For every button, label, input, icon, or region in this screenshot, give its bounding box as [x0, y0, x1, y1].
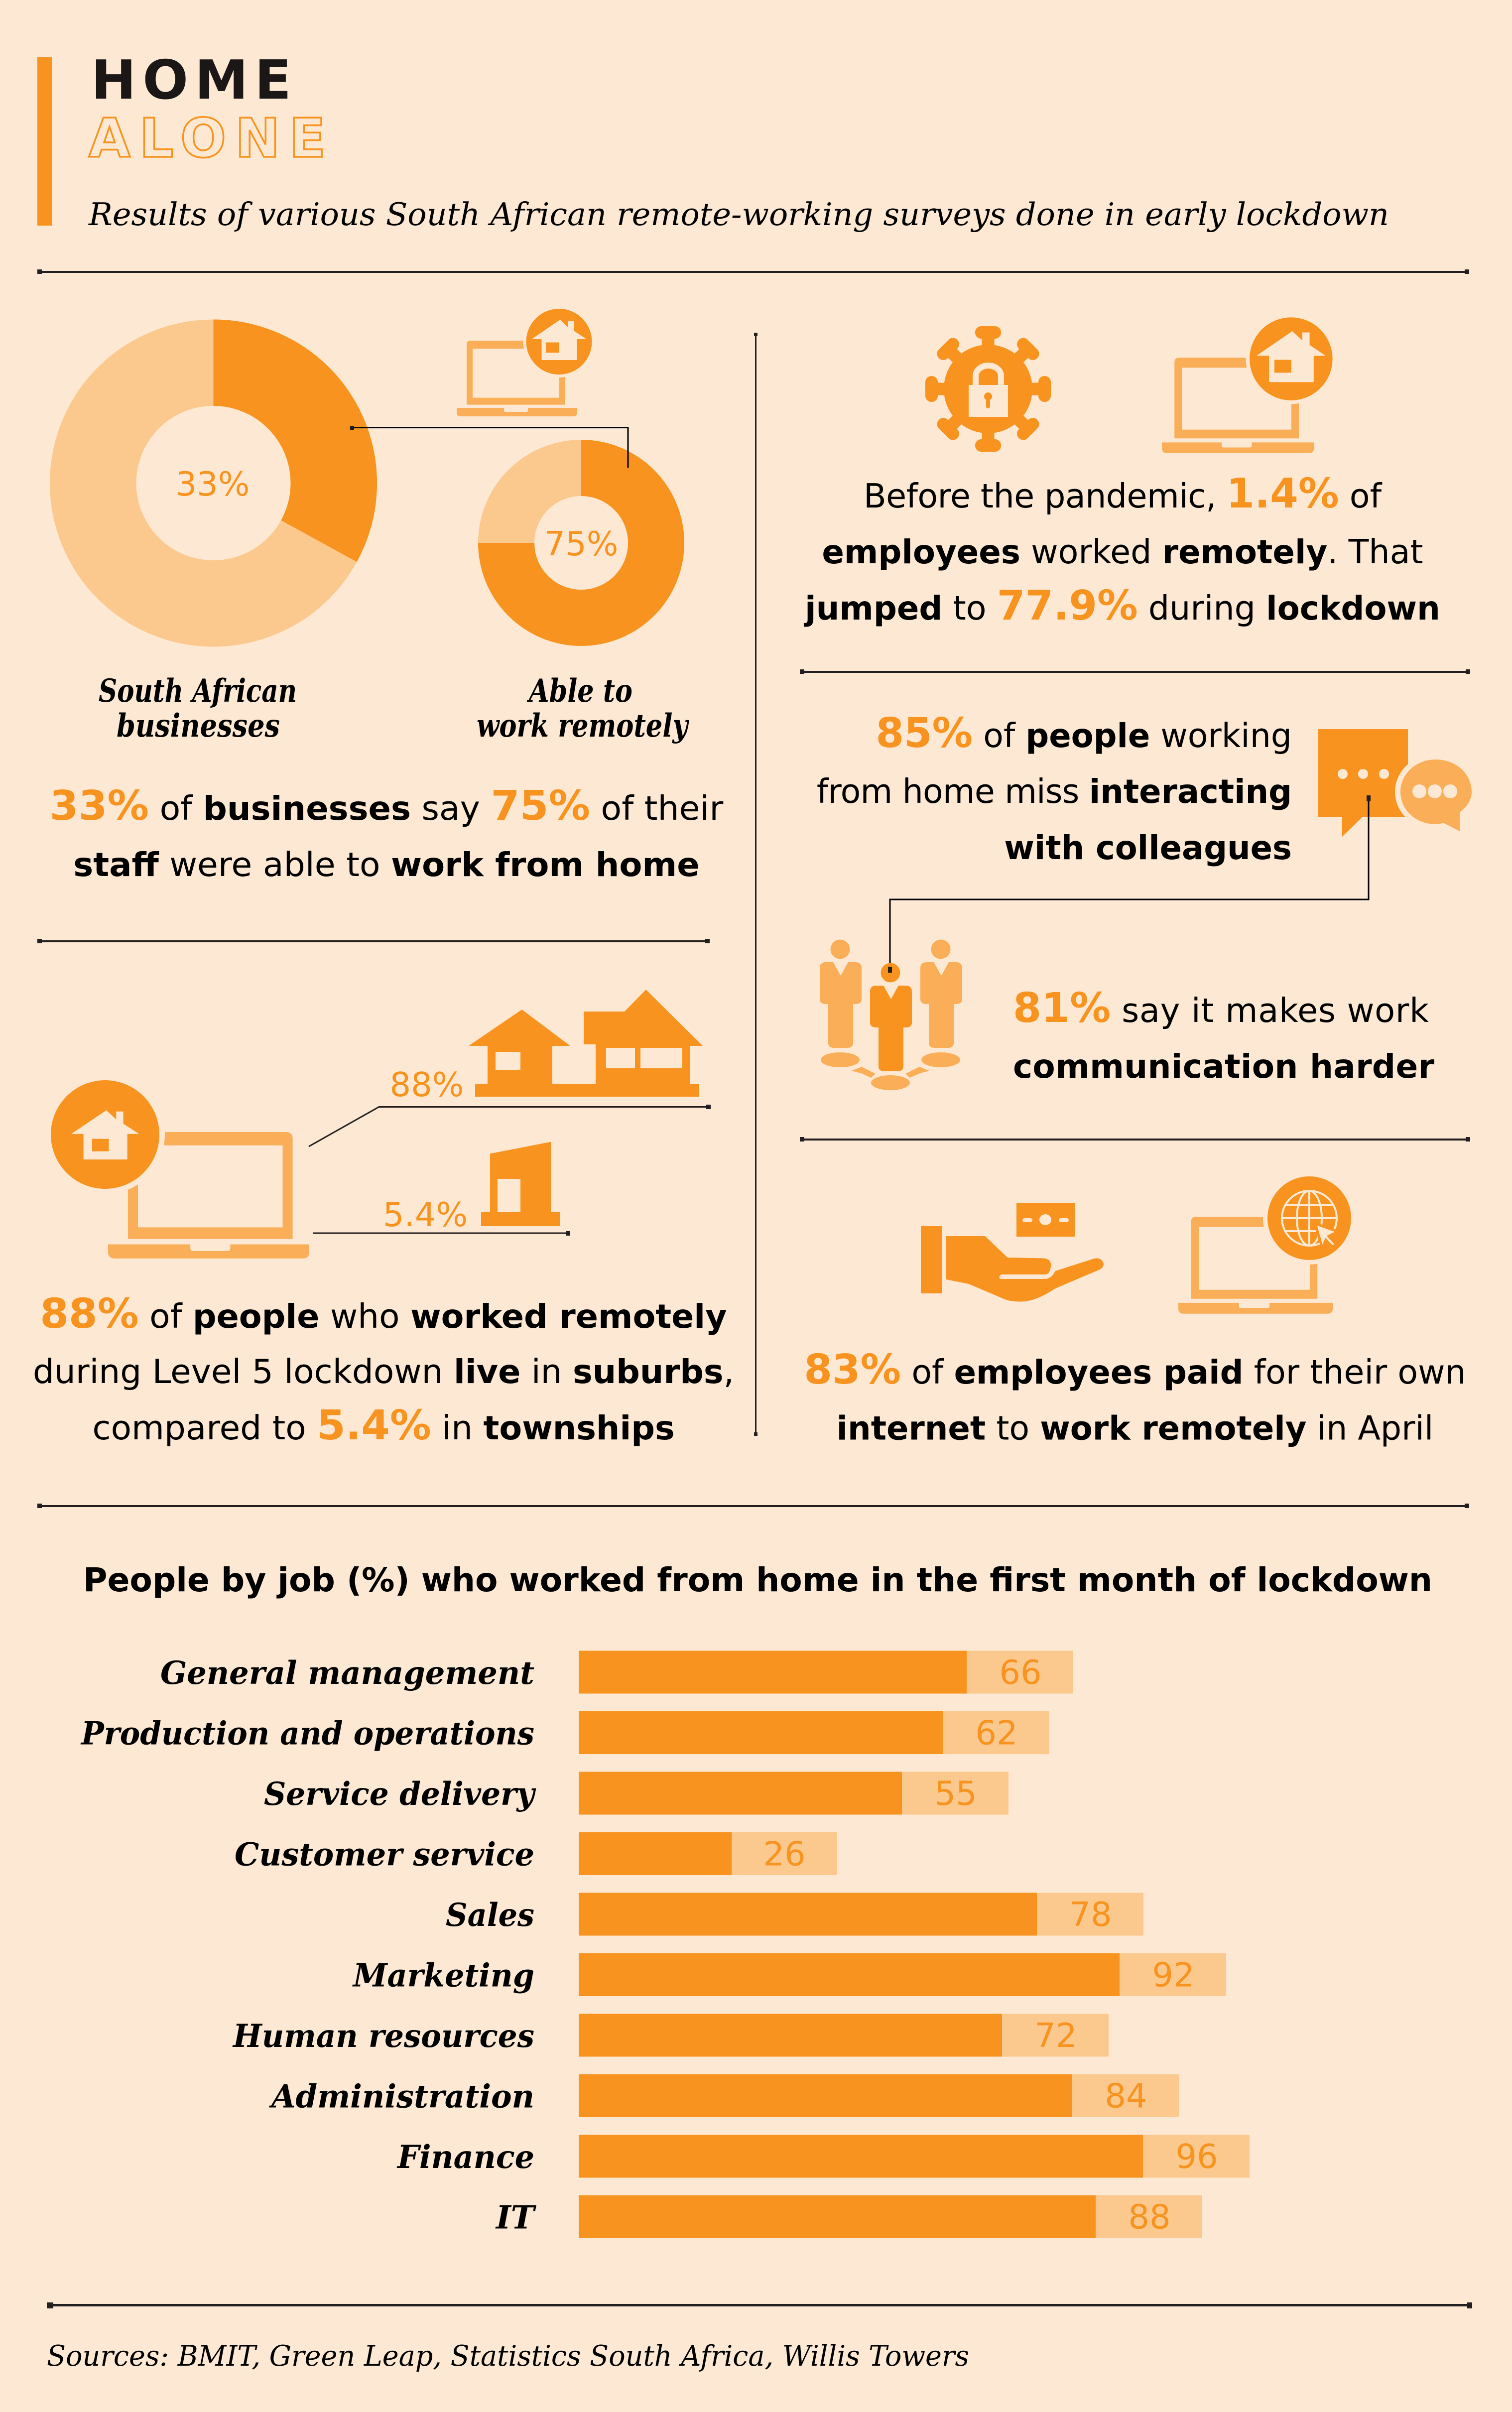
bar: service delivery: 55 [934, 1774, 977, 1813]
leader line: 5.4% [313, 1231, 570, 1236]
bar: administration [269, 2074, 1179, 2117]
text: 85% of people: 85% of people working [876, 710, 1292, 757]
text: 83% of employees paid: 83% of employees paid for their own [804, 1346, 1466, 1394]
text: 88% of people: compared to [92, 1408, 317, 1447]
bar: sales: 78 [1069, 1895, 1112, 1934]
bar: sales: Sales [446, 1897, 534, 1934]
panel: suburbs versus townships [33, 990, 734, 1449]
bar: finance: Finance [396, 2139, 534, 2176]
bar chart [80, 1650, 1250, 2238]
title accent bar [37, 57, 52, 226]
panel: before the pandemic [803, 314, 1440, 630]
value: 88%: 88% [390, 1065, 464, 1104]
text: 83% of employees paid: internet [837, 1409, 986, 1448]
bar: human resources [232, 2014, 1109, 2057]
icon: hand with banknote [921, 1203, 1104, 1302]
chart title: People by job (%) who worked from home in the first month of lockdown [83, 1561, 1432, 1599]
bar: general management [160, 1650, 1073, 1693]
text: 88% of people: live in suburbs, [454, 1352, 734, 1391]
icon: suburban houses [469, 990, 703, 1097]
bar: administration: Administration [269, 2078, 534, 2116]
leader line: 88% [309, 1105, 711, 1146]
text: 88% of people: during Level 5 lockdown [33, 1352, 454, 1391]
panel: businesses able to work remotely [50, 306, 724, 884]
subtitle: Results of various South African remote-working surveys done in early lockdown [88, 196, 1389, 233]
label: able to work remotely: Able to [527, 672, 632, 710]
bar: finance [396, 2135, 1250, 2177]
panel: paying for internet [804, 1172, 1466, 1448]
bar: general management: General management [160, 1654, 534, 1692]
bar: it [495, 2195, 1202, 2238]
text: 88% of people: 88% of people who worked remotely [40, 1290, 727, 1338]
text: 33% of businesses: 33% of businesses say 75% of their [50, 782, 723, 830]
text: 85% of people: interacting [1089, 772, 1292, 811]
bar: service delivery: Service delivery [264, 1776, 536, 1813]
bar: sales [446, 1893, 1143, 1935]
title: alone: ALONE [89, 108, 326, 170]
bar: it: IT [495, 2199, 536, 2236]
bar: marketing [352, 1953, 1226, 1996]
label: south african businesses [99, 672, 297, 745]
donut: 75% able to work remotely [478, 440, 684, 646]
label: south african businesses: businesses [117, 707, 280, 745]
sources: Sources: BMIT, Green Leap, Statistics South Africa, Willis Towers [47, 2340, 969, 2373]
bar: human resources: Human resources [232, 2018, 534, 2055]
text: before the pandemic: Before the pandemic, 1.4% of [864, 470, 1382, 517]
icon: virus with lock [925, 326, 1051, 452]
title: home: HOME [91, 49, 291, 112]
text: 88% of people: 5.4% in townships [317, 1402, 675, 1449]
donut: 33% of businesses: 33% [176, 465, 250, 504]
panel: missing colleagues [817, 710, 1477, 1090]
bar: finance: 96 [1175, 2137, 1218, 2176]
icon: laptop with home [457, 306, 595, 416]
bar: production and operations: Production and operations [80, 1715, 534, 1752]
text: before the pandemic: worked remotely. That [1031, 532, 1423, 571]
bar: it: 88 [1128, 2197, 1171, 2236]
text: 33% of businesses: were able to work from home [169, 845, 700, 884]
text: 33% of businesses: staff [73, 845, 159, 884]
bar: marketing: 92 [1152, 1955, 1195, 1994]
text: 85% of people: with colleagues [1004, 829, 1292, 867]
bar: marketing: Marketing [352, 1957, 534, 1994]
icon: laptop with globe [1178, 1172, 1356, 1314]
label: able to work remotely [477, 672, 689, 745]
icon: township shack [481, 1142, 560, 1226]
bar: customer service: Customer service [235, 1836, 534, 1874]
icon: three people [820, 939, 962, 1090]
value: 5.4%: 5.4% [383, 1195, 468, 1234]
bar: administration: 84 [1105, 2077, 1147, 2116]
bar: service delivery [264, 1772, 1008, 1815]
donut: 75% able to work remotely: 75% [544, 524, 618, 563]
bar: customer service [235, 1832, 837, 1875]
donut: 33% of businesses [93, 320, 377, 604]
connector [888, 795, 1371, 973]
connector [350, 426, 628, 468]
bar: general management: 66 [999, 1653, 1042, 1692]
text: before the pandemic: jumped [803, 589, 942, 628]
bar: customer service: 26 [763, 1835, 806, 1874]
icon: laptop with home [1162, 314, 1336, 453]
text: 81% communication harder: communication harder [1013, 1047, 1435, 1086]
panel: people by job [80, 1561, 1432, 2238]
icon: laptop with home [45, 1075, 309, 1259]
text: before the pandemic: to 77.9% during lockdown [953, 582, 1440, 630]
icon: chat bubbles [1318, 729, 1477, 837]
bar: production and operations: 62 [975, 1713, 1018, 1752]
bar: production and operations [80, 1711, 1049, 1754]
text: before the pandemic: employees [822, 533, 1020, 571]
label: able to work remotely: work remotely [477, 707, 689, 745]
text: 83% of employees paid: to work remotely in April [996, 1408, 1433, 1448]
title block [37, 49, 1389, 233]
text: 85% of people: from home miss [817, 772, 1089, 811]
bar: human resources: 72 [1034, 2016, 1077, 2055]
label: south african businesses: South African [99, 672, 297, 710]
text: 81% communication harder: 81% say it makes work [1013, 985, 1429, 1032]
